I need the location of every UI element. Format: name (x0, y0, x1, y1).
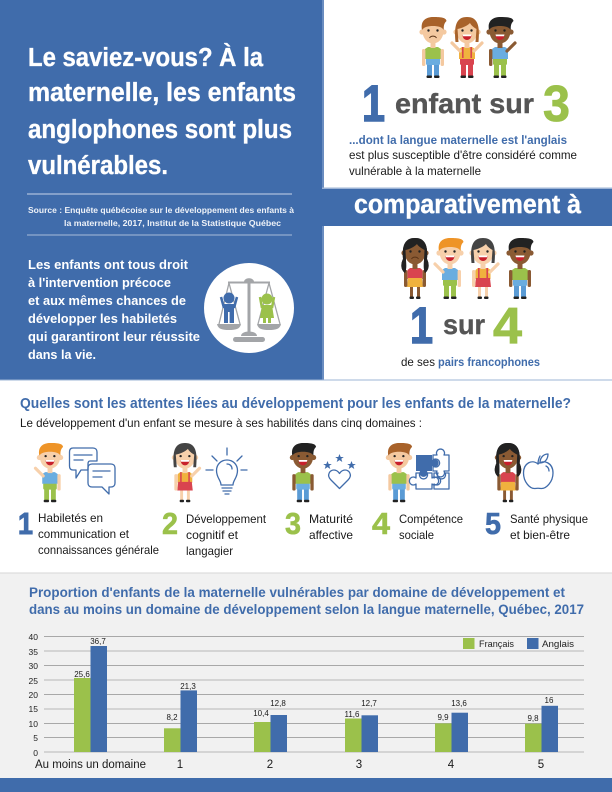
domain 2 (162, 443, 267, 558)
source text: Source : Enquête québécoise sur le développement des enfants à (28, 205, 294, 215)
domain 5 (485, 443, 588, 542)
y axis labels: 30 (29, 661, 38, 671)
y axis labels: 10 (29, 719, 38, 729)
domain 4 (372, 443, 463, 542)
label: connaissances générale (38, 543, 159, 557)
value labels: 10,4 (253, 709, 269, 718)
panel: chart section (0, 572, 612, 778)
child (386, 443, 412, 502)
category labels (35, 759, 544, 771)
y axis labels: 0 (33, 748, 38, 758)
label: Compétence (399, 512, 463, 526)
value labels: 9,9 (437, 713, 449, 722)
y axis labels: 35 (29, 647, 38, 657)
child: sad girl (401, 238, 429, 299)
child: smiling boy (506, 238, 534, 299)
legend: Anglais (542, 639, 574, 650)
title: maternelle, les enfants (28, 79, 296, 107)
legend: Français (479, 639, 514, 650)
label (510, 512, 588, 542)
source text: la maternelle, 2017, Institut de la Statistique Québec (64, 218, 281, 228)
chart title: dans au moins un domaine de développement selon la langue maternelle, Québec, 2017 (29, 602, 584, 617)
text block: rights of children: développer les habiletés (28, 311, 177, 326)
green bars: Français (74, 678, 542, 752)
domain 1 (18, 443, 159, 557)
child: dark-haired girl (469, 238, 498, 299)
source text (28, 205, 294, 228)
y axis labels: 40 (29, 632, 38, 642)
y axis labels: 15 (29, 704, 38, 714)
chart title (29, 585, 584, 617)
heading: Quelles sont les attentes liées au développement pour les enfants de la maternelle? (20, 395, 571, 412)
title: vulnérables. (28, 152, 168, 180)
y axis labels: 20 (29, 690, 38, 700)
icon: light bulb (206, 448, 247, 494)
child: orange-haired boy (435, 238, 464, 299)
label (399, 512, 463, 542)
band: comparativement à: comparativement à (354, 191, 582, 219)
value labels: 12,8 (270, 699, 286, 708)
value labels: 12,7 (361, 699, 377, 708)
bar chart (29, 632, 584, 771)
icon: scales with two children (204, 263, 294, 353)
value labels: 8,2 (166, 713, 178, 722)
child: girl with raised arms (452, 17, 482, 78)
title (28, 43, 296, 180)
label (186, 512, 267, 558)
label: communication et (38, 527, 130, 541)
number: 5 (485, 506, 501, 541)
category labels: 1 (177, 759, 183, 771)
child: waving boy (486, 17, 515, 78)
child (290, 443, 316, 502)
text: French-speaking peers: pairs francophones (438, 355, 540, 369)
statistic: 1 sur 4: sur (443, 309, 485, 340)
text block: mother tongue English: est plus susceptible d'être considéré comme (349, 148, 577, 162)
statistic: 1 enfant sur 3: 1 (362, 75, 385, 132)
section: five domains (18, 395, 588, 558)
label: Habiletés en (38, 511, 103, 525)
label: sociale (399, 528, 434, 542)
value labels (74, 637, 554, 723)
number: 2 (162, 506, 178, 541)
text block: mother tongue English: vulnérable à la maternelle (349, 164, 481, 178)
value labels: 16 (545, 696, 554, 705)
label: et bien-être (510, 528, 570, 542)
icon: apple (524, 454, 553, 489)
text block: rights of children: qui garantiront leur réussite (28, 329, 200, 344)
text block: mother tongue English: ...dont la langue maternelle est l'anglais (349, 133, 567, 147)
label (309, 512, 353, 542)
category labels: 2 (267, 759, 273, 771)
text: French-speaking peers: de ses (401, 355, 435, 369)
label: Santé physique (510, 512, 588, 526)
statistic: 1 sur 4: 1 (410, 297, 433, 354)
number: 1 (18, 506, 33, 541)
panel: did you know (0, 0, 322, 380)
icon: speech bubbles (70, 448, 115, 494)
child (172, 443, 200, 502)
icon: stars and heart (323, 454, 356, 488)
label (38, 511, 159, 557)
label: Développement (186, 512, 267, 526)
value labels: 13,6 (451, 699, 467, 708)
child: sad boy (419, 17, 447, 78)
text block: rights of children (28, 257, 200, 362)
domain 3 (285, 443, 356, 542)
category labels: 4 (448, 759, 455, 771)
label: cognitif et (186, 528, 239, 542)
y axis labels: 5 (33, 733, 38, 743)
text: French-speaking peers (401, 355, 540, 369)
child (35, 443, 63, 502)
illustration: four children (401, 238, 534, 299)
text block: rights of children: à l'intervention précoce (28, 275, 171, 290)
value labels: 9,8 (527, 714, 539, 723)
panel: 1 in 4 (322, 226, 540, 380)
value labels: 21,3 (180, 682, 196, 691)
label: langagier (186, 544, 233, 558)
statistic: 1 sur 4: 4 (493, 297, 523, 354)
statistic: 1 enfant sur 3: 3 (543, 75, 570, 132)
y axis labels: 25 (29, 676, 38, 686)
label: Maturité (309, 512, 353, 526)
text block: mother tongue English (349, 133, 577, 178)
title: anglophones sont plus (28, 116, 292, 144)
figure green (260, 294, 274, 323)
category labels: 3 (356, 759, 362, 771)
statistic: 1 enfant sur 3: enfant sur (395, 88, 534, 119)
value labels: 11,6 (345, 710, 360, 719)
child (495, 443, 521, 502)
legend (463, 638, 574, 650)
chart title: Proportion d'enfants de la maternelle vulnérables par domaine de développement et (29, 585, 565, 600)
category labels: Au moins un domaine (35, 759, 146, 771)
illustration: three children (419, 17, 515, 78)
label: affective (309, 528, 353, 542)
text block: rights of children: Les enfants ont tous droit (28, 257, 189, 272)
blue bars: Anglais (90, 646, 558, 752)
figure blue (221, 292, 237, 323)
band: comparativement à (322, 189, 612, 226)
text block: rights of children: dans la vie. (28, 347, 96, 362)
statistic: 1 sur 4 (410, 297, 523, 354)
number: 3 (285, 506, 301, 541)
footer band (0, 778, 612, 792)
statistic: 1 enfant sur 3 (362, 75, 570, 132)
value labels: 25,6 (74, 670, 90, 679)
text block: rights of children: et aux mêmes chances de (28, 293, 186, 308)
category labels: 5 (538, 759, 544, 771)
number: 4 (372, 506, 391, 541)
icon: puzzle (409, 449, 449, 489)
title: Le saviez-vous? À la (28, 43, 264, 72)
panel: 1 child in 3 (322, 0, 612, 189)
subheading: Le développement d'un enfant se mesure à ses habilités dans cinq domaines : (20, 416, 422, 430)
value labels: 36,7 (90, 637, 106, 646)
y axis labels (29, 632, 38, 758)
